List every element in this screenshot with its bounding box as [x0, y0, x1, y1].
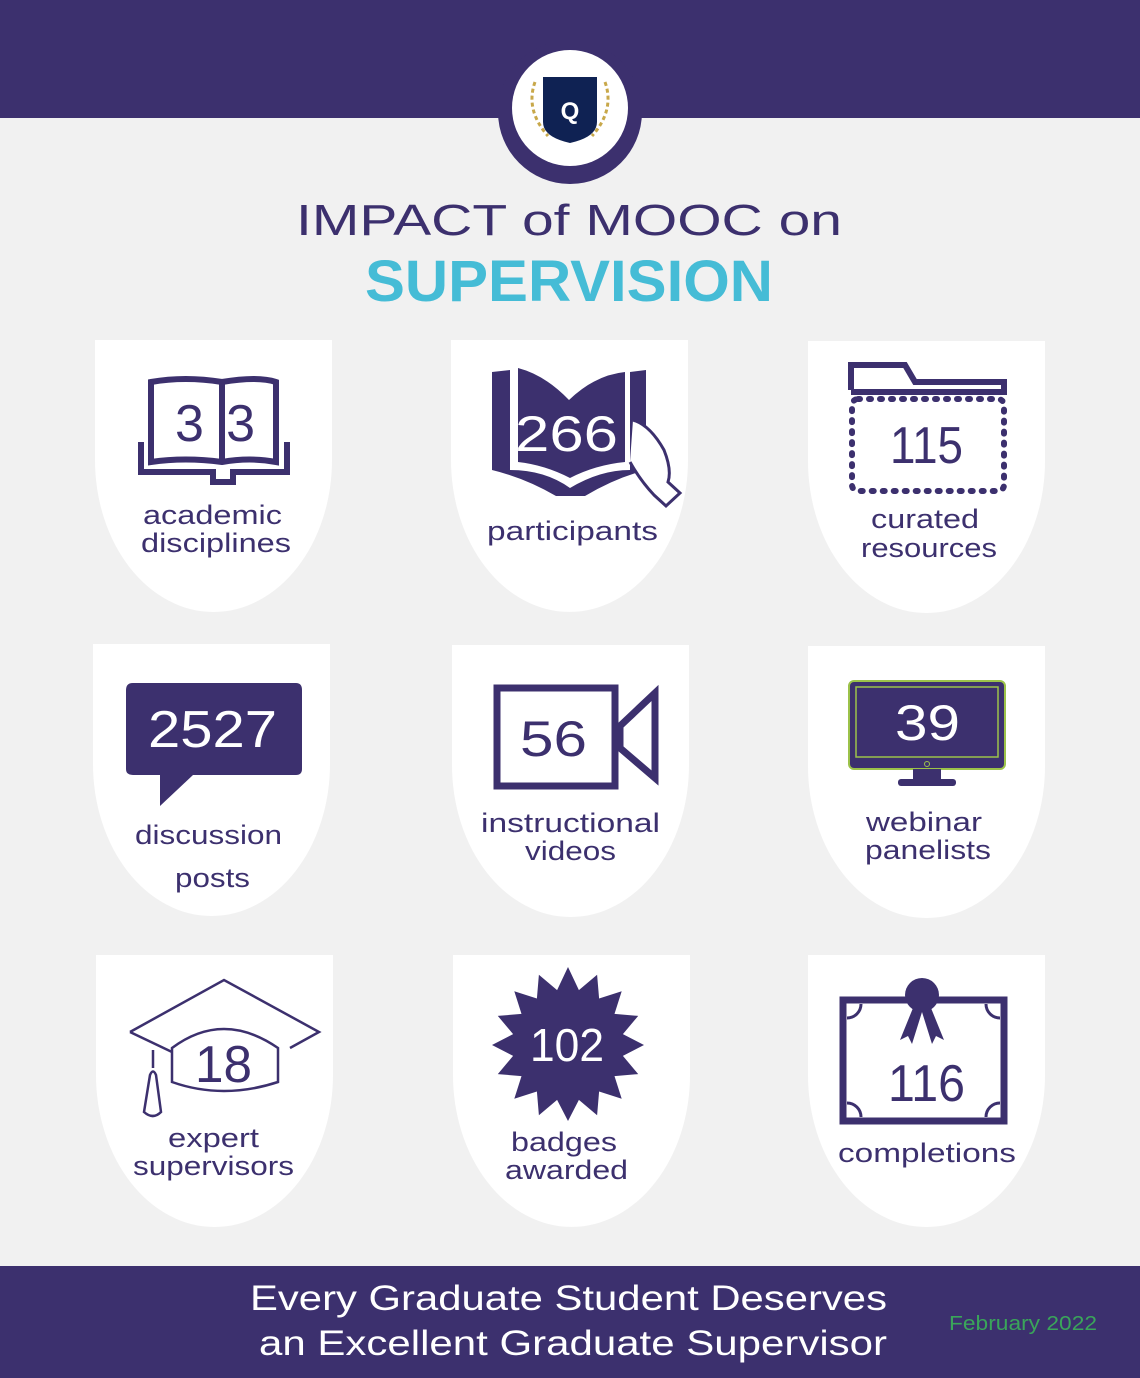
panel: webinar panelists: webinar [865, 807, 982, 837]
panel: academic disciplines: academic [143, 500, 282, 530]
panel: expert supervisors: supervisors [133, 1151, 294, 1181]
icon: certificate [843, 978, 1004, 1121]
panel: curated resources: resources [861, 533, 997, 563]
panel: academic disciplines: 33 [175, 395, 255, 453]
panel: badges awarded: badges [511, 1127, 617, 1157]
panel: instructional videos: 56 [520, 711, 587, 767]
panel: completions: completions [838, 1138, 1016, 1168]
panel: badges awarded: 102 [530, 1019, 604, 1071]
icon: monitor [849, 681, 1005, 786]
icon: speech bubble [126, 683, 302, 806]
panel: discussion posts: 2527 [148, 701, 277, 759]
panel: instructional videos [452, 645, 689, 917]
panel: participants: participants [487, 516, 658, 546]
panel: curated resources: 115 [890, 417, 963, 475]
logo [498, 40, 642, 184]
panel: discussion posts [93, 644, 330, 916]
icon: open book [141, 379, 287, 482]
footer slogan: Every Graduate Student Deserves [250, 1279, 887, 1318]
panel: expert supervisors: expert [168, 1123, 260, 1153]
icon: filled book with hand [492, 368, 680, 506]
panel: badges awarded [453, 955, 690, 1227]
panel: instructional videos: instructional [481, 808, 660, 838]
title: IMPACT of MOOC on [296, 196, 842, 245]
panel: webinar panelists: 39 [895, 695, 960, 751]
panel: academic disciplines [95, 340, 332, 612]
panel: webinar panelists [808, 646, 1045, 918]
footer slogan: an Excellent Graduate Supervisor [259, 1324, 887, 1363]
title: SUPERVISION [365, 249, 773, 314]
panel: webinar panelists: panelists [865, 835, 991, 865]
logo: Q [561, 98, 579, 125]
panel: completions: 116 [888, 1055, 965, 1113]
header band [0, 0, 1140, 118]
title [296, 196, 842, 314]
icon: graduation cap [130, 980, 319, 1116]
icon: star badge [492, 967, 644, 1121]
panel: instructional videos: videos [525, 836, 616, 866]
date: February 2022 [949, 1313, 1097, 1335]
footer slogan [250, 1279, 887, 1363]
panel: participants: 266 [515, 406, 618, 462]
panel: curated resources: curated [871, 504, 979, 534]
panel: badges awarded: awarded [505, 1155, 628, 1185]
icon: folder [851, 365, 1004, 491]
panel: discussion posts: discussion [135, 820, 282, 850]
footer band [0, 1266, 1140, 1378]
panel: curated resources [808, 341, 1045, 613]
panel: academic disciplines: disciplines [141, 528, 291, 558]
panel: discussion posts: posts [175, 863, 250, 893]
panel: expert supervisors [96, 955, 333, 1227]
icon: video camera [497, 688, 655, 786]
panel: participants [451, 340, 688, 612]
panel: expert supervisors: 18 [195, 1036, 252, 1094]
panel: completions [808, 955, 1045, 1227]
